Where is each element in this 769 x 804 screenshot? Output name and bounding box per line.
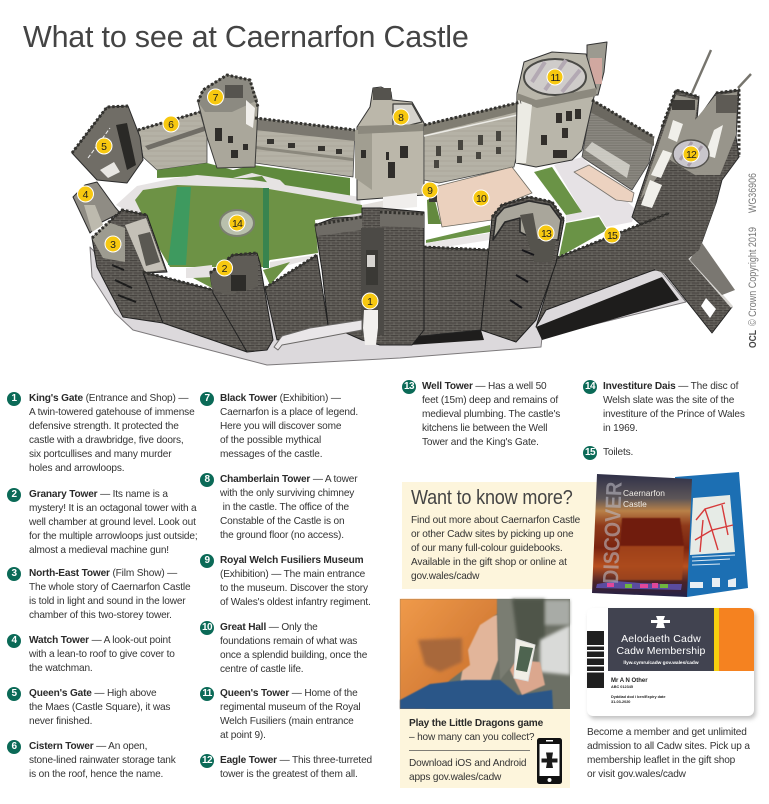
item 14: investiture of the Prince of Wales <box>603 409 745 420</box>
marker 2: 2 <box>222 263 228 275</box>
item 11 <box>200 687 361 741</box>
divider <box>409 750 530 752</box>
download text <box>409 758 526 782</box>
colour strip <box>596 581 682 590</box>
front wall left <box>143 272 247 352</box>
membership text: admission to all Cadw sites. Pick up a <box>587 741 750 752</box>
battlements <box>72 75 739 290</box>
yard <box>554 157 636 227</box>
want to know more text: of our many full-colour guidebooks. <box>411 543 562 554</box>
marker 12 <box>683 146 699 162</box>
item 13: kitchens lie between the Well <box>422 423 547 434</box>
item 14 <box>583 380 745 434</box>
item 9: (Exhibition) — The main entrance <box>220 569 365 580</box>
list column 1: 2 <box>12 489 16 500</box>
numbered markers <box>78 69 699 309</box>
marker 3: 3 <box>110 239 116 251</box>
item 1: King's Gate (Entrance and Shop) — <box>29 393 188 404</box>
item 2: mystery! It is an octagonal tower with a <box>29 503 197 514</box>
tower 2 <box>210 253 273 352</box>
logo boxes <box>690 578 736 588</box>
reference code: WG36906 <box>747 173 759 213</box>
marker 13 <box>538 225 554 241</box>
wall to gate <box>265 255 328 340</box>
great hall floor <box>434 167 532 227</box>
membership card <box>587 608 756 719</box>
guidebook front cover: Castle <box>623 499 647 509</box>
title: What to see at Caernarfon Castle <box>23 20 469 54</box>
marker 6: 6 <box>168 119 174 131</box>
tower 12 <box>632 90 739 250</box>
jacket <box>400 680 553 709</box>
plinth <box>90 247 686 365</box>
marker 1: 1 <box>367 296 373 308</box>
king's gate <box>315 208 424 345</box>
barcode <box>587 631 604 688</box>
item 1 <box>7 392 195 474</box>
marker 10 <box>473 190 489 206</box>
item 8: Constable of the Castle is on <box>220 516 344 527</box>
item 7: of the possible mythical <box>220 435 321 446</box>
item 7 <box>200 392 358 460</box>
castle illustration <box>72 42 751 365</box>
crown copyright: © Crown Copyright 2019 <box>747 227 759 326</box>
orange stripe <box>719 608 754 671</box>
item 1: holes and arrowloops. <box>29 463 124 474</box>
list column 1: 1 <box>12 393 16 404</box>
marker 14 <box>229 215 245 231</box>
list column 1 <box>7 392 197 780</box>
marker 7: 7 <box>213 92 219 104</box>
marker 13: 13 <box>541 228 552 240</box>
item 11: Welch Fusiliers (main entrance <box>220 716 354 727</box>
membership card: Cadw Membership <box>616 645 706 657</box>
cadw cross <box>542 752 558 768</box>
text: 14 <box>585 381 595 392</box>
back wall left <box>138 112 207 170</box>
item 3: chamber of this two-storey tower. <box>29 610 172 621</box>
icon: phone app <box>537 738 562 784</box>
item 4: the watchman. <box>29 663 93 674</box>
marker 12: 12 <box>686 149 697 161</box>
member details: Mr A N Other <box>611 678 648 684</box>
item 10 <box>200 621 367 675</box>
membership card: llyw.cymru/cadw gov.wales/cadw <box>623 660 699 666</box>
tower 4 <box>73 182 120 233</box>
right wall <box>582 100 654 190</box>
want to know more text: gov.wales/cadw <box>411 571 479 582</box>
item 5: the Maes (Castle Square), it was <box>29 702 170 713</box>
item 6: stone-lined rainwater storage tank <box>29 755 176 766</box>
marker 2 <box>216 260 232 276</box>
want to know more text: Find out more about Caernarfon Castle <box>411 515 580 526</box>
item 10: foundations remain of what was <box>220 636 357 647</box>
item 8: the ground floor (no access). <box>220 530 344 541</box>
item 3: is told in light and sound in the lower <box>29 596 185 607</box>
arm and hand <box>510 660 545 695</box>
face <box>460 615 498 684</box>
membership card: Dyddiad dod i ben/Expiry date <box>611 695 665 699</box>
item 5: Queen's Gate — High above <box>29 688 156 699</box>
marker 5: 5 <box>101 141 107 153</box>
item 7: messages of the castle. <box>220 449 322 460</box>
marker 4 <box>78 186 94 202</box>
item 2: Granary Tower — Its name is a <box>29 489 168 500</box>
item 2: almost a medieval machine gun! <box>29 545 169 556</box>
marker 9 <box>422 182 438 198</box>
item 5: never finished. <box>29 716 92 727</box>
membership text <box>587 727 750 780</box>
marker 3 <box>105 236 121 252</box>
membership text: membership leaflet in the gift shop <box>587 755 735 766</box>
list column 1: 4 <box>12 635 16 646</box>
item 8 <box>200 473 358 541</box>
tower 7 <box>198 75 258 168</box>
download text: apps gov.wales/cadw <box>409 772 501 782</box>
panel background: little dragons <box>400 709 570 788</box>
item 1: A twin-towered gatehouse of immense <box>29 407 195 418</box>
map roads <box>695 503 733 552</box>
tower 11 <box>587 42 607 95</box>
item 13 <box>402 380 560 448</box>
marker 8: 8 <box>398 112 404 124</box>
marker 8 <box>393 109 409 125</box>
hair <box>400 599 497 709</box>
dais <box>220 210 254 236</box>
marker 11: 11 <box>550 72 561 84</box>
item 10: Great Hall — Only the <box>220 622 318 633</box>
marker 10: 10 <box>476 193 487 205</box>
item 12 <box>200 754 372 780</box>
membership text: or visit gov.wales/cadw <box>587 769 686 780</box>
membership card: 31-03-2020 <box>611 700 630 704</box>
copyright line <box>747 173 759 348</box>
marker 14: 14 <box>232 218 243 230</box>
card titles: Aelodaeth Cadw <box>621 633 701 645</box>
marker 5 <box>96 138 112 154</box>
list column 2: 8 <box>205 474 209 485</box>
list column 1: 6 <box>12 741 16 752</box>
list column 2: 9 <box>205 555 209 566</box>
item 6 <box>7 740 176 780</box>
item 9: to the museum. Discover the story <box>220 583 368 594</box>
yellow stripe <box>714 608 719 671</box>
king's gate rear <box>362 200 386 225</box>
want to know more text <box>411 515 580 582</box>
photo: girl with phone <box>400 599 570 709</box>
item 6: Cistern Tower — An open, <box>29 741 147 752</box>
list column 2: 10 <box>202 622 212 633</box>
marker 9: 9 <box>427 185 433 197</box>
list column 1: 5 <box>12 688 16 699</box>
little dragons text: Play the Little Dragons game <box>409 718 543 729</box>
membership text: Become a member and get unlimited <box>587 727 747 738</box>
item 13: feet (15m) deep and remains of <box>422 395 558 406</box>
list column 2: 11 <box>202 688 212 699</box>
item 4: Watch Tower — A look-out point <box>29 635 171 646</box>
item 11: at point 9). <box>220 730 266 741</box>
marker 7 <box>208 89 224 105</box>
item 7: Caernarfon is a place of legend. <box>220 407 358 418</box>
front wall right <box>412 247 489 337</box>
want to know more text: or other Cadw sites by picking up one <box>411 529 573 540</box>
tower 5 <box>72 106 143 183</box>
item 11: regimental museum of the Royal <box>220 702 361 713</box>
item 12: Eagle Tower — This three-turreted <box>220 755 372 766</box>
item 13: Tower and the King's Gate. <box>422 437 539 448</box>
item 4 <box>7 634 175 674</box>
item 9: Royal Welch Fusiliers Museum <box>220 555 363 566</box>
little dragons text <box>409 718 543 743</box>
tower 3 <box>92 210 167 323</box>
guidebook front cover <box>592 474 692 597</box>
marker 15: 15 <box>607 230 618 242</box>
book title: Caernarfon <box>623 488 665 498</box>
item 15: Toilets. <box>603 447 633 458</box>
want to know more text: Available in the gift shop or online at <box>411 557 567 568</box>
item 2: for the multiple arrowloops just outside; <box>29 531 197 542</box>
item 1: castle with a drawbridge, five doors, <box>29 435 184 446</box>
item 3: North-East Tower (Film Show) — <box>29 568 177 579</box>
back wall centre <box>255 118 355 177</box>
item 2 <box>7 488 197 556</box>
cross emblem <box>651 616 670 628</box>
item 14: Investiture Dais — The disc of <box>603 381 738 392</box>
OCL mark: OCL <box>748 330 759 348</box>
marker 4: 4 <box>83 189 89 201</box>
membership card: ABC 012345 <box>611 685 633 689</box>
panel background: want to know more <box>402 482 598 589</box>
list column 1: 3 <box>12 568 16 579</box>
item 10: centre of castle life. <box>220 664 303 675</box>
list column 2: 7 <box>205 393 209 404</box>
phone <box>514 639 535 681</box>
item 1: six portcullises and many murder <box>29 449 171 460</box>
item 13: medieval plumbing. The castle's <box>422 409 560 420</box>
card header <box>608 608 714 671</box>
item 9: of Wales's oldest infantry regiment. <box>220 597 371 608</box>
gate roadway <box>363 310 378 345</box>
castle photo <box>620 518 684 546</box>
item 5 <box>7 687 170 727</box>
want to know more heading: Want to know more? <box>411 486 573 509</box>
item 3: The whole story of Caernarfon Castle <box>29 582 190 593</box>
item 7: Black Tower (Exhibition) — <box>220 393 341 404</box>
item 12: tower is the greatest of them all. <box>220 769 358 780</box>
item 8: in the castle. The office of the <box>223 502 349 513</box>
item 3 <box>7 567 190 621</box>
item 1: defensive strength. It protected the <box>29 421 179 432</box>
download text: Download iOS and Android <box>409 758 526 769</box>
item 2: well chamber at ground level. Look out <box>29 517 196 528</box>
item 14: in 1969. <box>603 423 638 434</box>
item 8: Chamberlain Tower — A tower <box>220 474 357 485</box>
item 7: Here you will discover some <box>220 421 341 432</box>
item 13: Well Tower — Has a well 50 <box>422 381 546 392</box>
map <box>690 495 735 555</box>
item 10: once a splendid building, once the <box>220 650 367 661</box>
discover lettering: DISCOVER <box>598 481 627 584</box>
bridge abutment <box>662 243 732 333</box>
item 14: Welsh slate was the site of the <box>603 395 734 406</box>
wall behind great hall <box>424 102 526 183</box>
item 8: with the only surviving chimney <box>220 488 354 499</box>
item 15 <box>583 446 633 460</box>
list column 2: 12 <box>202 755 212 766</box>
list column 2 <box>200 392 372 780</box>
item 9 <box>200 554 371 608</box>
little dragons text: – how many can you collect? <box>409 732 534 743</box>
shadowed ditch <box>536 277 679 340</box>
guidebook back: blue map <box>675 472 748 597</box>
flag poles <box>692 50 751 93</box>
lawns and paths <box>157 163 350 197</box>
marker 11 <box>547 69 563 85</box>
marker 6 <box>163 116 179 132</box>
text: 13 <box>404 381 414 392</box>
text: 15 <box>585 447 595 458</box>
marker 15 <box>604 227 620 243</box>
marker 1 <box>362 293 378 309</box>
tower 8 <box>357 87 424 200</box>
item 6: is on the roof, hence the name. <box>29 769 163 780</box>
tower 13 <box>481 197 564 342</box>
item 11: Queen's Tower — Home of the <box>220 688 358 699</box>
item 4: with a lean-to roof to give cover to <box>29 649 175 660</box>
wall 13 to 12 <box>536 213 669 327</box>
